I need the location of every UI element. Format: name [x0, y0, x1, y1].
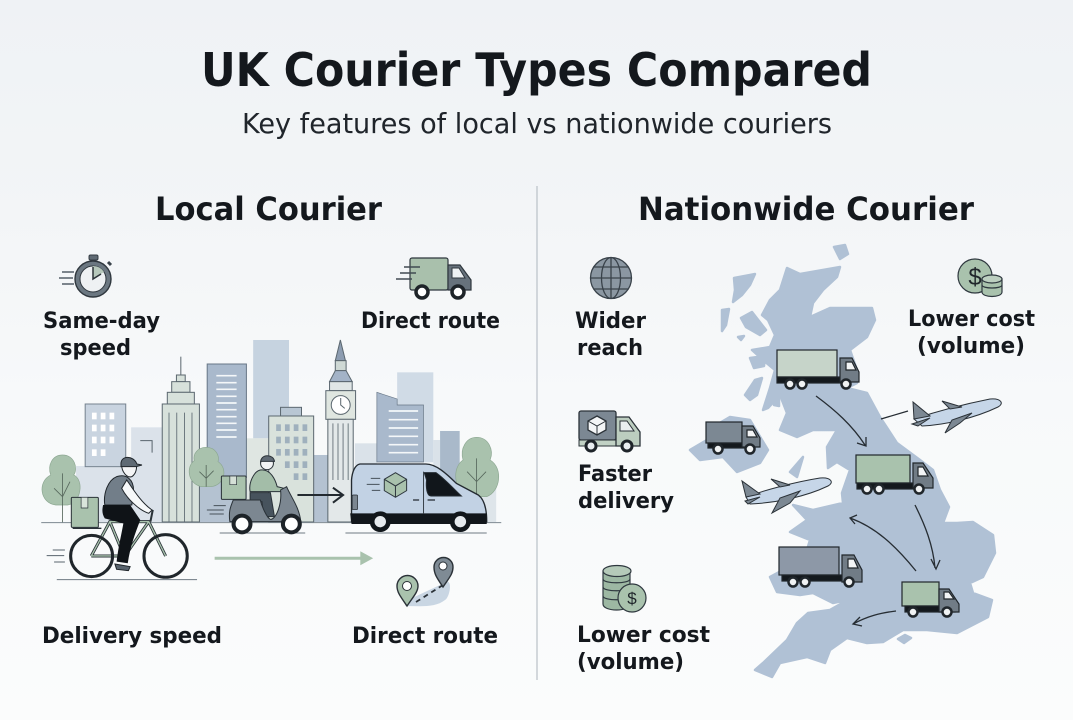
- route arrow 1: [816, 396, 866, 446]
- cyclist: [47, 457, 197, 580]
- label: lower cost volume: Lower cost: [577, 623, 710, 648]
- label: lower cost volume right: [908, 307, 1035, 359]
- plane: north: [912, 399, 1001, 433]
- icon: coin stack: $: [627, 589, 637, 608]
- map: northern ireland: [690, 417, 768, 472]
- label: lower cost volume right: (volume): [917, 334, 1025, 359]
- delivery van: [345, 464, 487, 533]
- scooter rider: [207, 456, 305, 533]
- label: faster delivery: [578, 462, 674, 514]
- icon: coin and stack: [958, 259, 1002, 296]
- tree: right: [456, 437, 499, 497]
- label: direct route bottom: Direct route: [352, 624, 498, 649]
- subtitle: Key features of local vs nationwide couriers: [242, 107, 832, 140]
- label: wider reach: [575, 309, 646, 361]
- plane connector: [881, 411, 908, 419]
- label: same-day speed: speed: [60, 336, 131, 361]
- tree: centre: [189, 447, 224, 487]
- label: same-day speed: Same-day: [43, 309, 160, 334]
- label: faster delivery: delivery: [578, 489, 674, 514]
- icon: parcel truck: [579, 411, 640, 451]
- building: green office: [269, 407, 314, 522]
- icon: globe: [590, 258, 632, 298]
- truck: northern ireland: [706, 422, 760, 454]
- building: green tower: [162, 357, 199, 522]
- icon: delivery truck: [396, 258, 471, 298]
- plane: south: [742, 478, 831, 513]
- label: lower cost volume: [577, 623, 710, 675]
- truck: northern england: [856, 455, 933, 494]
- truck: south england: [902, 582, 959, 616]
- title: UK Courier Types Compared: [201, 43, 872, 97]
- label: same-day speed: [43, 309, 160, 361]
- building: blue slanted: [377, 392, 424, 462]
- heading: nationwide courier: Nationwide Courier: [638, 190, 974, 228]
- label: delivery speed: Delivery speed: [42, 624, 222, 649]
- building: windows block: [85, 404, 126, 467]
- background buildings: [76, 340, 496, 522]
- heading: local courier: Local Courier: [155, 190, 382, 228]
- icon: stopwatch: [59, 255, 111, 297]
- route arrow 4: [853, 611, 896, 626]
- map: islands: [722, 245, 911, 643]
- icon: route pins: [397, 558, 453, 606]
- tree: left: [42, 455, 80, 523]
- truck: wales: [779, 547, 862, 586]
- label: direct route top: Direct route: [361, 309, 500, 334]
- label: faster delivery: Faster: [578, 462, 652, 487]
- label: lower cost volume right: Lower cost: [908, 307, 1035, 332]
- label: wider reach: Wider: [575, 309, 646, 334]
- route arrow 2: [915, 505, 940, 569]
- truck: scotland: [777, 350, 859, 388]
- map: great britain: [752, 267, 995, 677]
- icon: coin and stack: $: [968, 264, 982, 291]
- building: clock tower: [326, 340, 356, 522]
- map of UK: [690, 245, 995, 677]
- route arrow 3: [850, 515, 916, 571]
- arrow: green progress: [215, 551, 373, 565]
- arrow: scooter to van: [297, 488, 343, 503]
- building: blue tower: [207, 364, 246, 477]
- city illustration: [41, 340, 501, 580]
- label: wider reach: reach: [577, 336, 643, 361]
- icon: coin stack: [603, 566, 646, 612]
- label: lower cost volume: (volume): [577, 650, 684, 675]
